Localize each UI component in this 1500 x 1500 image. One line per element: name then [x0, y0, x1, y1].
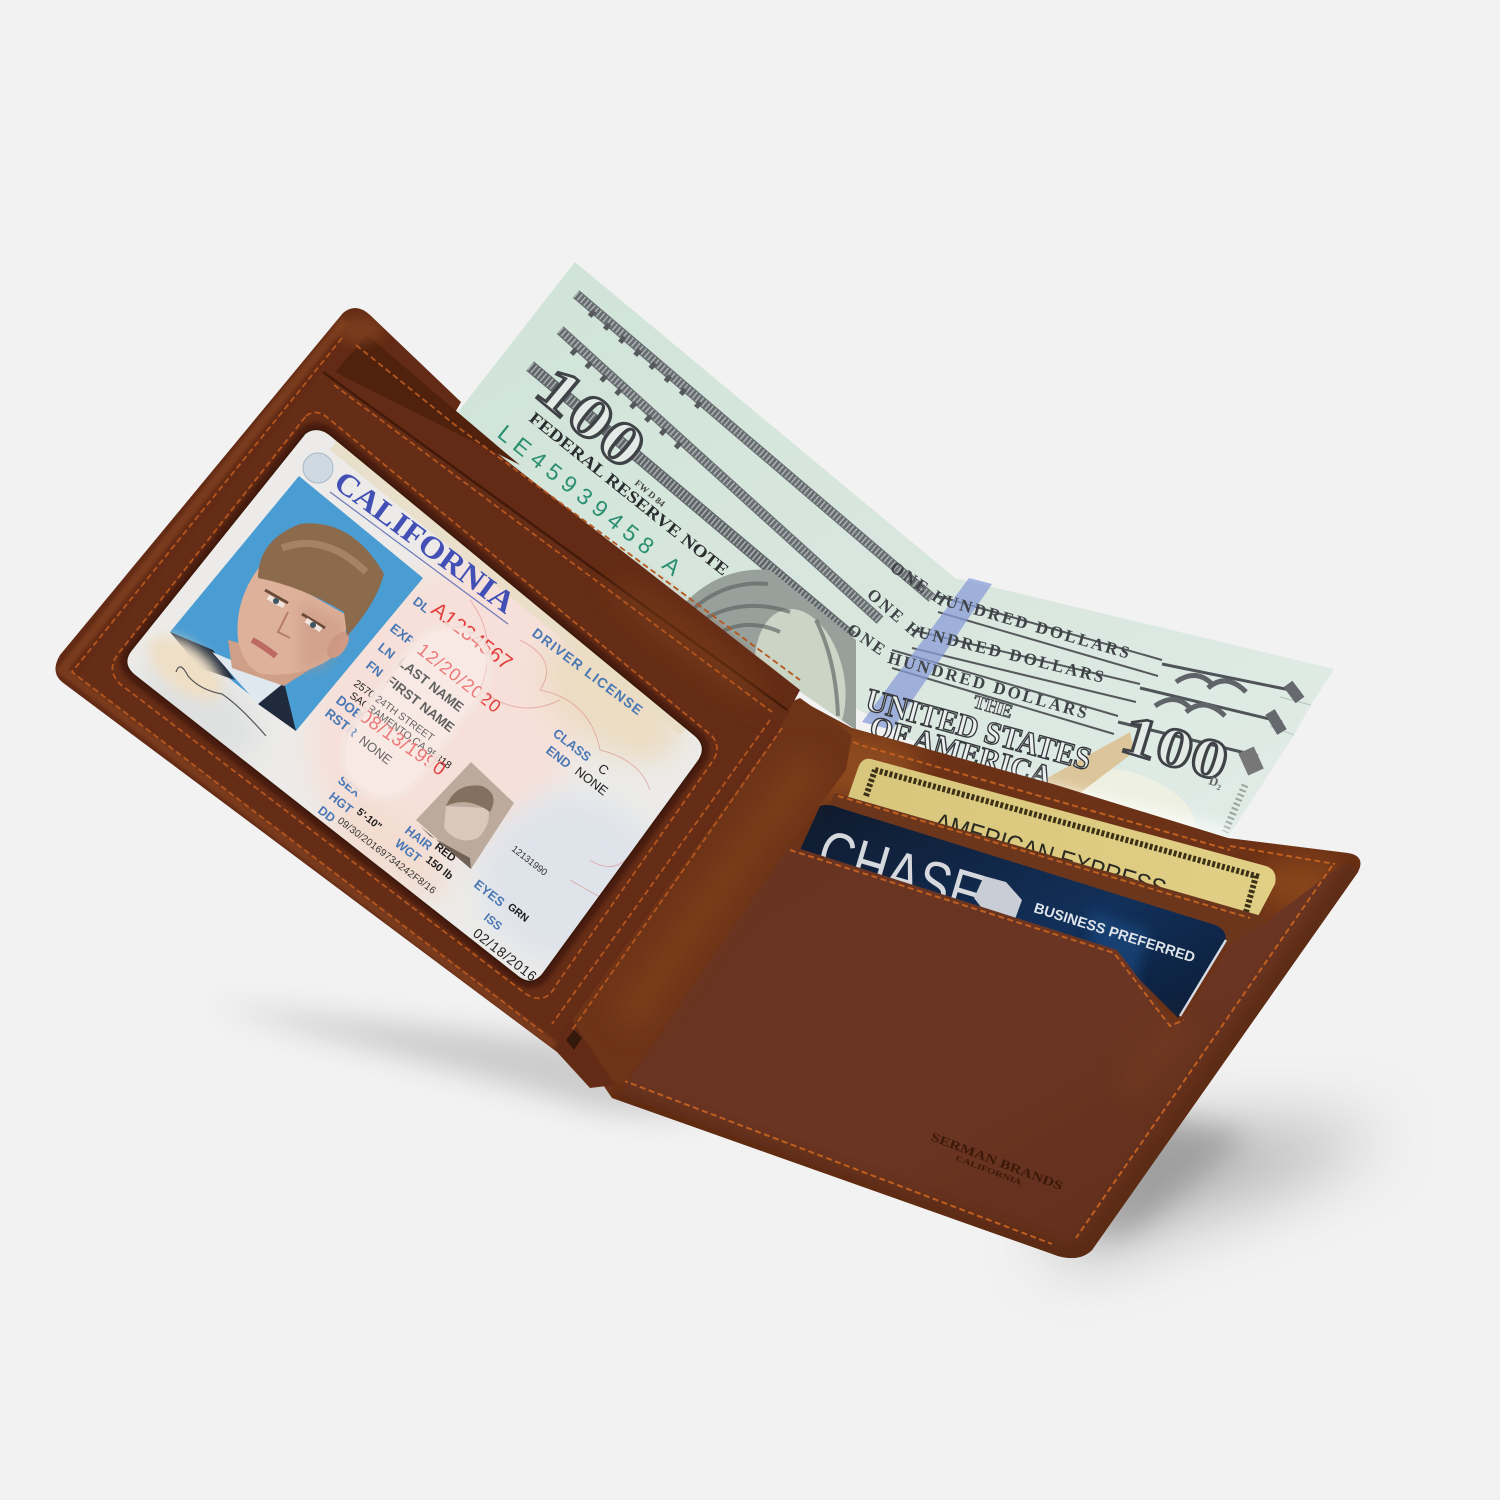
right 100 numeral: 100 [1114, 703, 1236, 794]
embossed brand mark [929, 1130, 1065, 1193]
spine gap [566, 1030, 582, 1050]
american express gold card: AMERICAN EXPRESS [931, 808, 1169, 903]
left 100 numeral: 100 [523, 353, 659, 482]
haze above pocket [1000, 772, 1230, 846]
signature [176, 667, 266, 736]
window inner edge [126, 429, 703, 982]
engraved border band back bill [576, 294, 1300, 700]
license fields: EXP [387, 621, 418, 649]
spine highlight [610, 750, 825, 1030]
cash: stack of hundred dollar bills: OF AMERICA [866, 710, 1056, 794]
driver license window [127, 430, 702, 981]
license fields: RED [432, 841, 458, 865]
tan ribbon [1040, 732, 1134, 808]
cash: stack of hundred dollar bills: ONE HUNDRED DOLLARS [868, 590, 1104, 682]
engraved border band front bill [530, 366, 1258, 832]
serial number: LE45939458 A [493, 420, 686, 581]
license fields: 12131990 [509, 844, 549, 878]
license fields: A1234567 [427, 598, 517, 675]
chase blue card [800, 805, 1226, 1018]
license fields: CLASS [550, 726, 594, 765]
right panel leather [560, 700, 1360, 1258]
card colour washes [120, 435, 701, 965]
back pocket shade [335, 335, 520, 465]
bill edges [1270, 697, 1311, 735]
license fields: NONE [572, 764, 611, 799]
engraved border band middle bill [560, 330, 1282, 732]
wallet right panel [560, 700, 1360, 1258]
license fields: SACRAMENTO,CA 95818 [347, 690, 454, 772]
embossed brand mark: CALIFORNIA [954, 1153, 1023, 1187]
license fields: FN [363, 658, 386, 680]
license fields: RSTR [322, 706, 361, 740]
front pocket [620, 845, 1358, 1258]
face shading [300, 600, 346, 672]
eyes [265, 590, 325, 630]
shirt [212, 652, 285, 704]
state seal [303, 453, 333, 483]
license fields: 09/30/20169734242F8/16 [335, 816, 438, 897]
pocket stitching [622, 722, 1335, 1244]
bill paper [450, 262, 1334, 842]
license fields: 02/18/2016 [470, 925, 540, 984]
portrait photo [170, 476, 423, 731]
license fields: FIRST NAME [383, 673, 457, 735]
license fields: NONE [356, 733, 395, 768]
leather frame [78, 372, 790, 1040]
chase blue card: CHASE [810, 817, 991, 931]
cash: stack of hundred dollar bills [458, 262, 1334, 838]
american express gold card [847, 759, 1276, 920]
embossed brand mark: SERMAN BRANDS [929, 1130, 1065, 1193]
license fields: LAST NAME [395, 655, 466, 715]
license fields: END [543, 743, 574, 771]
worn edges [62, 316, 790, 1046]
cash: stack of hundred dollar bills: UNITED STATES [862, 681, 1095, 777]
license fields: ISS [481, 910, 505, 933]
united states of america: THE [971, 692, 1015, 723]
federal reserve note caption: FEDERAL RESERVE NOTE [525, 408, 732, 579]
license fields: EYES [471, 877, 508, 910]
wallet left panel with ID window [55, 308, 800, 1088]
secondary ghost photo [416, 762, 514, 869]
california title: CALIFORNIA [328, 463, 523, 620]
mouth [252, 640, 276, 656]
license fields: 08/13/1990 [355, 706, 449, 780]
license fields: 5'-10" [354, 806, 384, 833]
cream portrait oval [1045, 753, 1205, 867]
license fields: DRIVER LICENSE [529, 625, 646, 718]
left panel stitching [72, 338, 800, 1034]
wallet spine [550, 698, 852, 1086]
license fields [315, 594, 646, 984]
chase blue card: BUSINESS PREFERRED [1032, 901, 1197, 966]
nose [278, 612, 290, 638]
orange wear highlights [780, 731, 1344, 911]
license fields: DD [315, 803, 338, 825]
license fields: HGT [326, 789, 356, 817]
license fields: LN [375, 640, 398, 662]
license fields: C [595, 761, 612, 778]
middle pocket strip [810, 793, 1265, 948]
jacket [170, 632, 296, 731]
cash: stack of hundred dollar bills: ONE HUNDRED DOLLARS [892, 563, 1129, 658]
cash: stack of hundred dollar bills: ONE HUNDRED DOLLARS [848, 625, 1087, 718]
one hundred dollars rows [889, 570, 1160, 668]
license fields: DOB [333, 693, 366, 723]
fine map lines [470, 600, 650, 920]
license fields: GRN [505, 901, 531, 925]
license fields: 2570 24TH STREET [351, 678, 437, 744]
hair highlight [282, 543, 366, 572]
face [237, 566, 348, 675]
signature strip [144, 628, 230, 702]
small series letter: FW D 84 [632, 479, 666, 510]
license fields: 150 lb [423, 854, 455, 883]
franklin portrait [686, 570, 856, 729]
ear [328, 632, 349, 658]
blue security strip [862, 578, 992, 730]
small letter d: D₂ [1207, 773, 1224, 791]
hair [258, 523, 384, 636]
neck [228, 640, 318, 686]
license fields: 12/20/2020 [414, 639, 505, 717]
title rule [330, 492, 508, 624]
license fields: WGT [392, 836, 424, 866]
hologram oval [343, 622, 494, 795]
outer edge wear [612, 866, 1358, 1256]
outer leather [55, 308, 800, 1088]
license fields: DL [410, 594, 433, 616]
card base [127, 430, 702, 981]
wallet ground shadow [210, 1005, 1390, 1255]
license fields: HAIR [402, 823, 435, 853]
license fields: SEX [335, 773, 364, 800]
